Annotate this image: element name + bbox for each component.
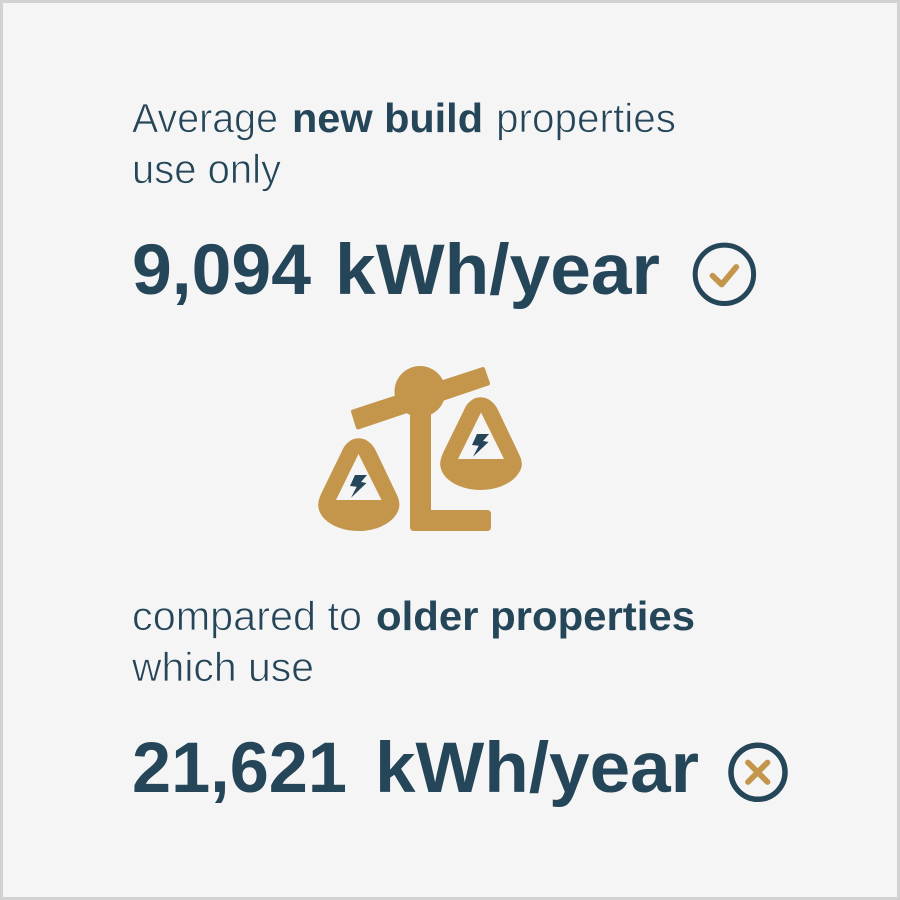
bolt (472, 434, 489, 457)
heading: new build figure (132, 231, 660, 310)
heading: older properties figure: 21,621 (132, 729, 347, 808)
beam (353, 369, 488, 428)
heading: new build figure: 9,094 (132, 231, 312, 310)
text block: new build intro (132, 95, 676, 192)
text block: new build intro: new build (292, 95, 483, 141)
icon: cross in circle (731, 745, 785, 799)
right pan (440, 397, 522, 490)
icon: balance scale (318, 366, 522, 531)
text block: new build intro: properties (496, 95, 676, 141)
heading: older properties figure (132, 729, 699, 808)
heading: new build figure: kWh/year (335, 231, 660, 310)
icon: check mark in circle (695, 245, 754, 304)
text block: older properties intro: which use (131, 644, 314, 690)
text block: older properties intro: compared to (132, 593, 362, 639)
text block: new build intro: Average (132, 95, 278, 141)
text block: older properties intro (131, 593, 695, 690)
left pan (318, 438, 399, 531)
post and base (410, 405, 491, 531)
text block: new build intro: use only (132, 146, 281, 192)
pivot (394, 366, 446, 417)
text block: older properties intro: older properties (376, 593, 695, 639)
bolt (350, 475, 367, 498)
heading: older properties figure: kWh/year (375, 729, 699, 808)
